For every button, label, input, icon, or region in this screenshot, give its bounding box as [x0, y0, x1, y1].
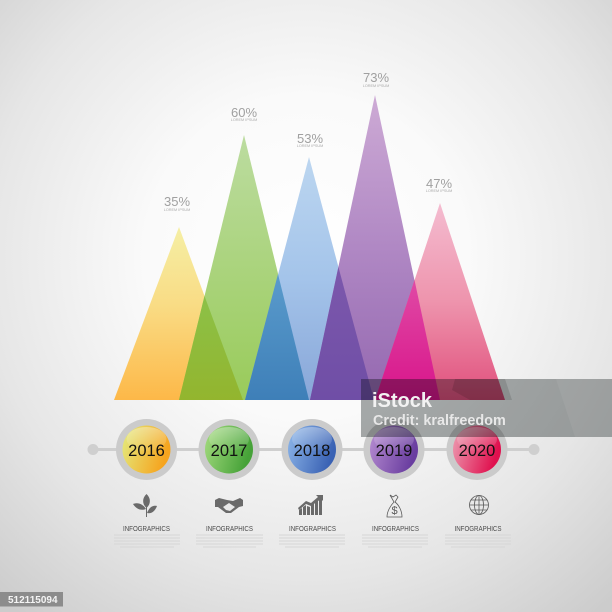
- year node: 2020: 2020: [459, 442, 495, 460]
- caption column 3: [279, 524, 345, 547]
- triangle chart: [114, 95, 505, 400]
- year node: 2018: 2018: [294, 442, 330, 460]
- icon: growth chart: [298, 495, 323, 515]
- caption column 2: INFOGRAPHICS: [206, 524, 253, 533]
- icon: money bag: $: [391, 505, 398, 517]
- label: 53%: 53%: [297, 131, 323, 146]
- timeline line: [88, 444, 540, 455]
- label: 60%: 60%: [231, 105, 257, 120]
- caption column 2: [196, 524, 263, 547]
- icon: handshake: [215, 498, 243, 513]
- year node: 2017: 2017: [211, 442, 247, 460]
- label: 60%: LOREM IPSUM: [231, 118, 257, 122]
- caption column 3: INFOGRAPHICS: [289, 524, 336, 533]
- year node: 2019: 2019: [376, 442, 412, 460]
- year node: 2018: [282, 419, 342, 480]
- year node: 2020: [446, 419, 508, 480]
- year node: 2019: [364, 419, 424, 480]
- icon: globe: [470, 496, 488, 514]
- image id tag: 512115094: [8, 595, 58, 606]
- caption column 5: INFOGRAPHICS: [454, 524, 502, 533]
- watermark band: [361, 379, 612, 437]
- label: 35%: LOREM IPSUM: [164, 208, 190, 212]
- label: 35%: 35%: [164, 194, 190, 209]
- icon: money bag: [387, 495, 402, 517]
- icon: leaves: [133, 494, 157, 517]
- year node: 2016: 2016: [128, 442, 165, 460]
- caption column 4: [362, 524, 428, 547]
- caption column 4: INFOGRAPHICS: [372, 524, 419, 533]
- image id tag: [0, 592, 63, 606]
- label: 47%: 47%: [426, 176, 452, 191]
- caption column 1: INFOGRAPHICS: [123, 524, 170, 533]
- label: 73%: LOREM IPSUM: [363, 84, 389, 88]
- label: 53%: LOREM IPSUM: [297, 144, 323, 148]
- label: 47%: LOREM IPSUM: [426, 189, 452, 193]
- caption column 1: [114, 524, 180, 547]
- watermark band: Credit: kralfreedom: [373, 413, 506, 429]
- watermark band: iStock: [372, 390, 433, 412]
- year node: 2017: [198, 419, 260, 480]
- caption column 5: [445, 524, 511, 547]
- year node: 2016: [116, 419, 177, 480]
- label: 73%: 73%: [363, 70, 389, 85]
